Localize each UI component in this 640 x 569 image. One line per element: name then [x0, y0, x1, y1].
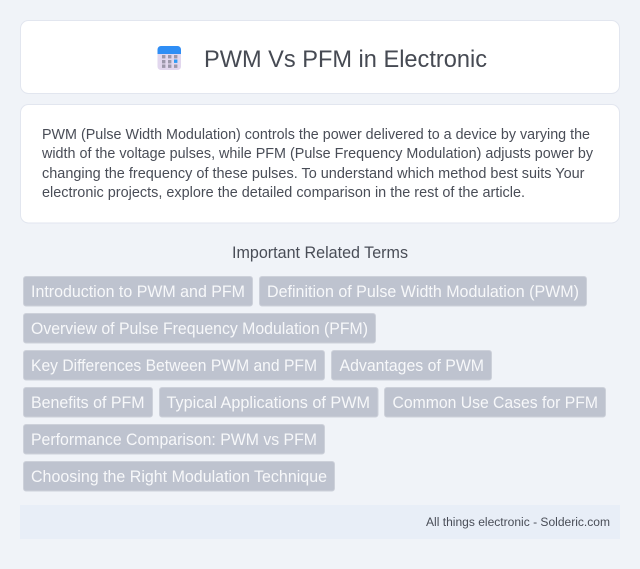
tag: key differences	[24, 350, 324, 380]
tag: definition of PWM	[260, 276, 586, 306]
description text: electronic projects, explore the detailed comparison in the rest of the article.	[42, 185, 525, 201]
tag: overview of PFM	[24, 314, 376, 343]
tag: advantages of PWM	[332, 350, 492, 380]
tag: common use cases	[384, 388, 606, 417]
tag: choosing technique	[24, 462, 334, 491]
description text	[41, 127, 594, 201]
tag: overview of PFM: Overview of Pulse Frequency Modulation (PFM)	[31, 319, 368, 338]
tag: common use cases: Common Use Cases for PFM	[392, 393, 598, 412]
description text: width of the voltage pulses, while PFM (Pulse Frequency Modulation) adjusts power by	[41, 146, 594, 162]
panel: description	[20, 104, 620, 223]
title text: PWM Vs PFM in Electronic	[204, 46, 487, 73]
footer credit: All things electronic - Solderic.com	[426, 515, 610, 529]
tag: typical applications: Typical Applications of PWM	[166, 393, 370, 412]
tag: advantages of PWM: Advantages of PWM	[340, 356, 484, 375]
tag: performance comparison	[24, 424, 324, 454]
tag: key differences: Key Differences Between PWM and PFM	[31, 356, 317, 375]
tag: introduction	[24, 276, 252, 306]
description text: changing the frequency of these pulses. To understand which method best suits Your	[42, 166, 585, 182]
tag: definition of PWM: Definition of Pulse Width Modulation (PWM)	[267, 282, 579, 301]
tag: choosing technique: Choosing the Right Modulation Technique	[31, 467, 327, 486]
tag: introduction: Introduction to PWM and PFM	[31, 282, 245, 301]
heading: important related terms: Important Related Terms	[232, 244, 408, 262]
tag: benefits of PFM: Benefits of PFM	[31, 393, 144, 412]
tag: typical applications	[160, 388, 378, 417]
footer bar	[20, 505, 620, 539]
tag: performance comparison: Performance Comparison: PWM vs PFM	[31, 430, 317, 449]
term tags	[24, 276, 606, 491]
icon: calendar	[158, 46, 181, 70]
description text: PWM (Pulse Width Modulation) controls the power delivered to a device by varying the	[42, 127, 590, 143]
tag: benefits of PFM	[24, 388, 152, 417]
panel: title header	[20, 20, 620, 94]
